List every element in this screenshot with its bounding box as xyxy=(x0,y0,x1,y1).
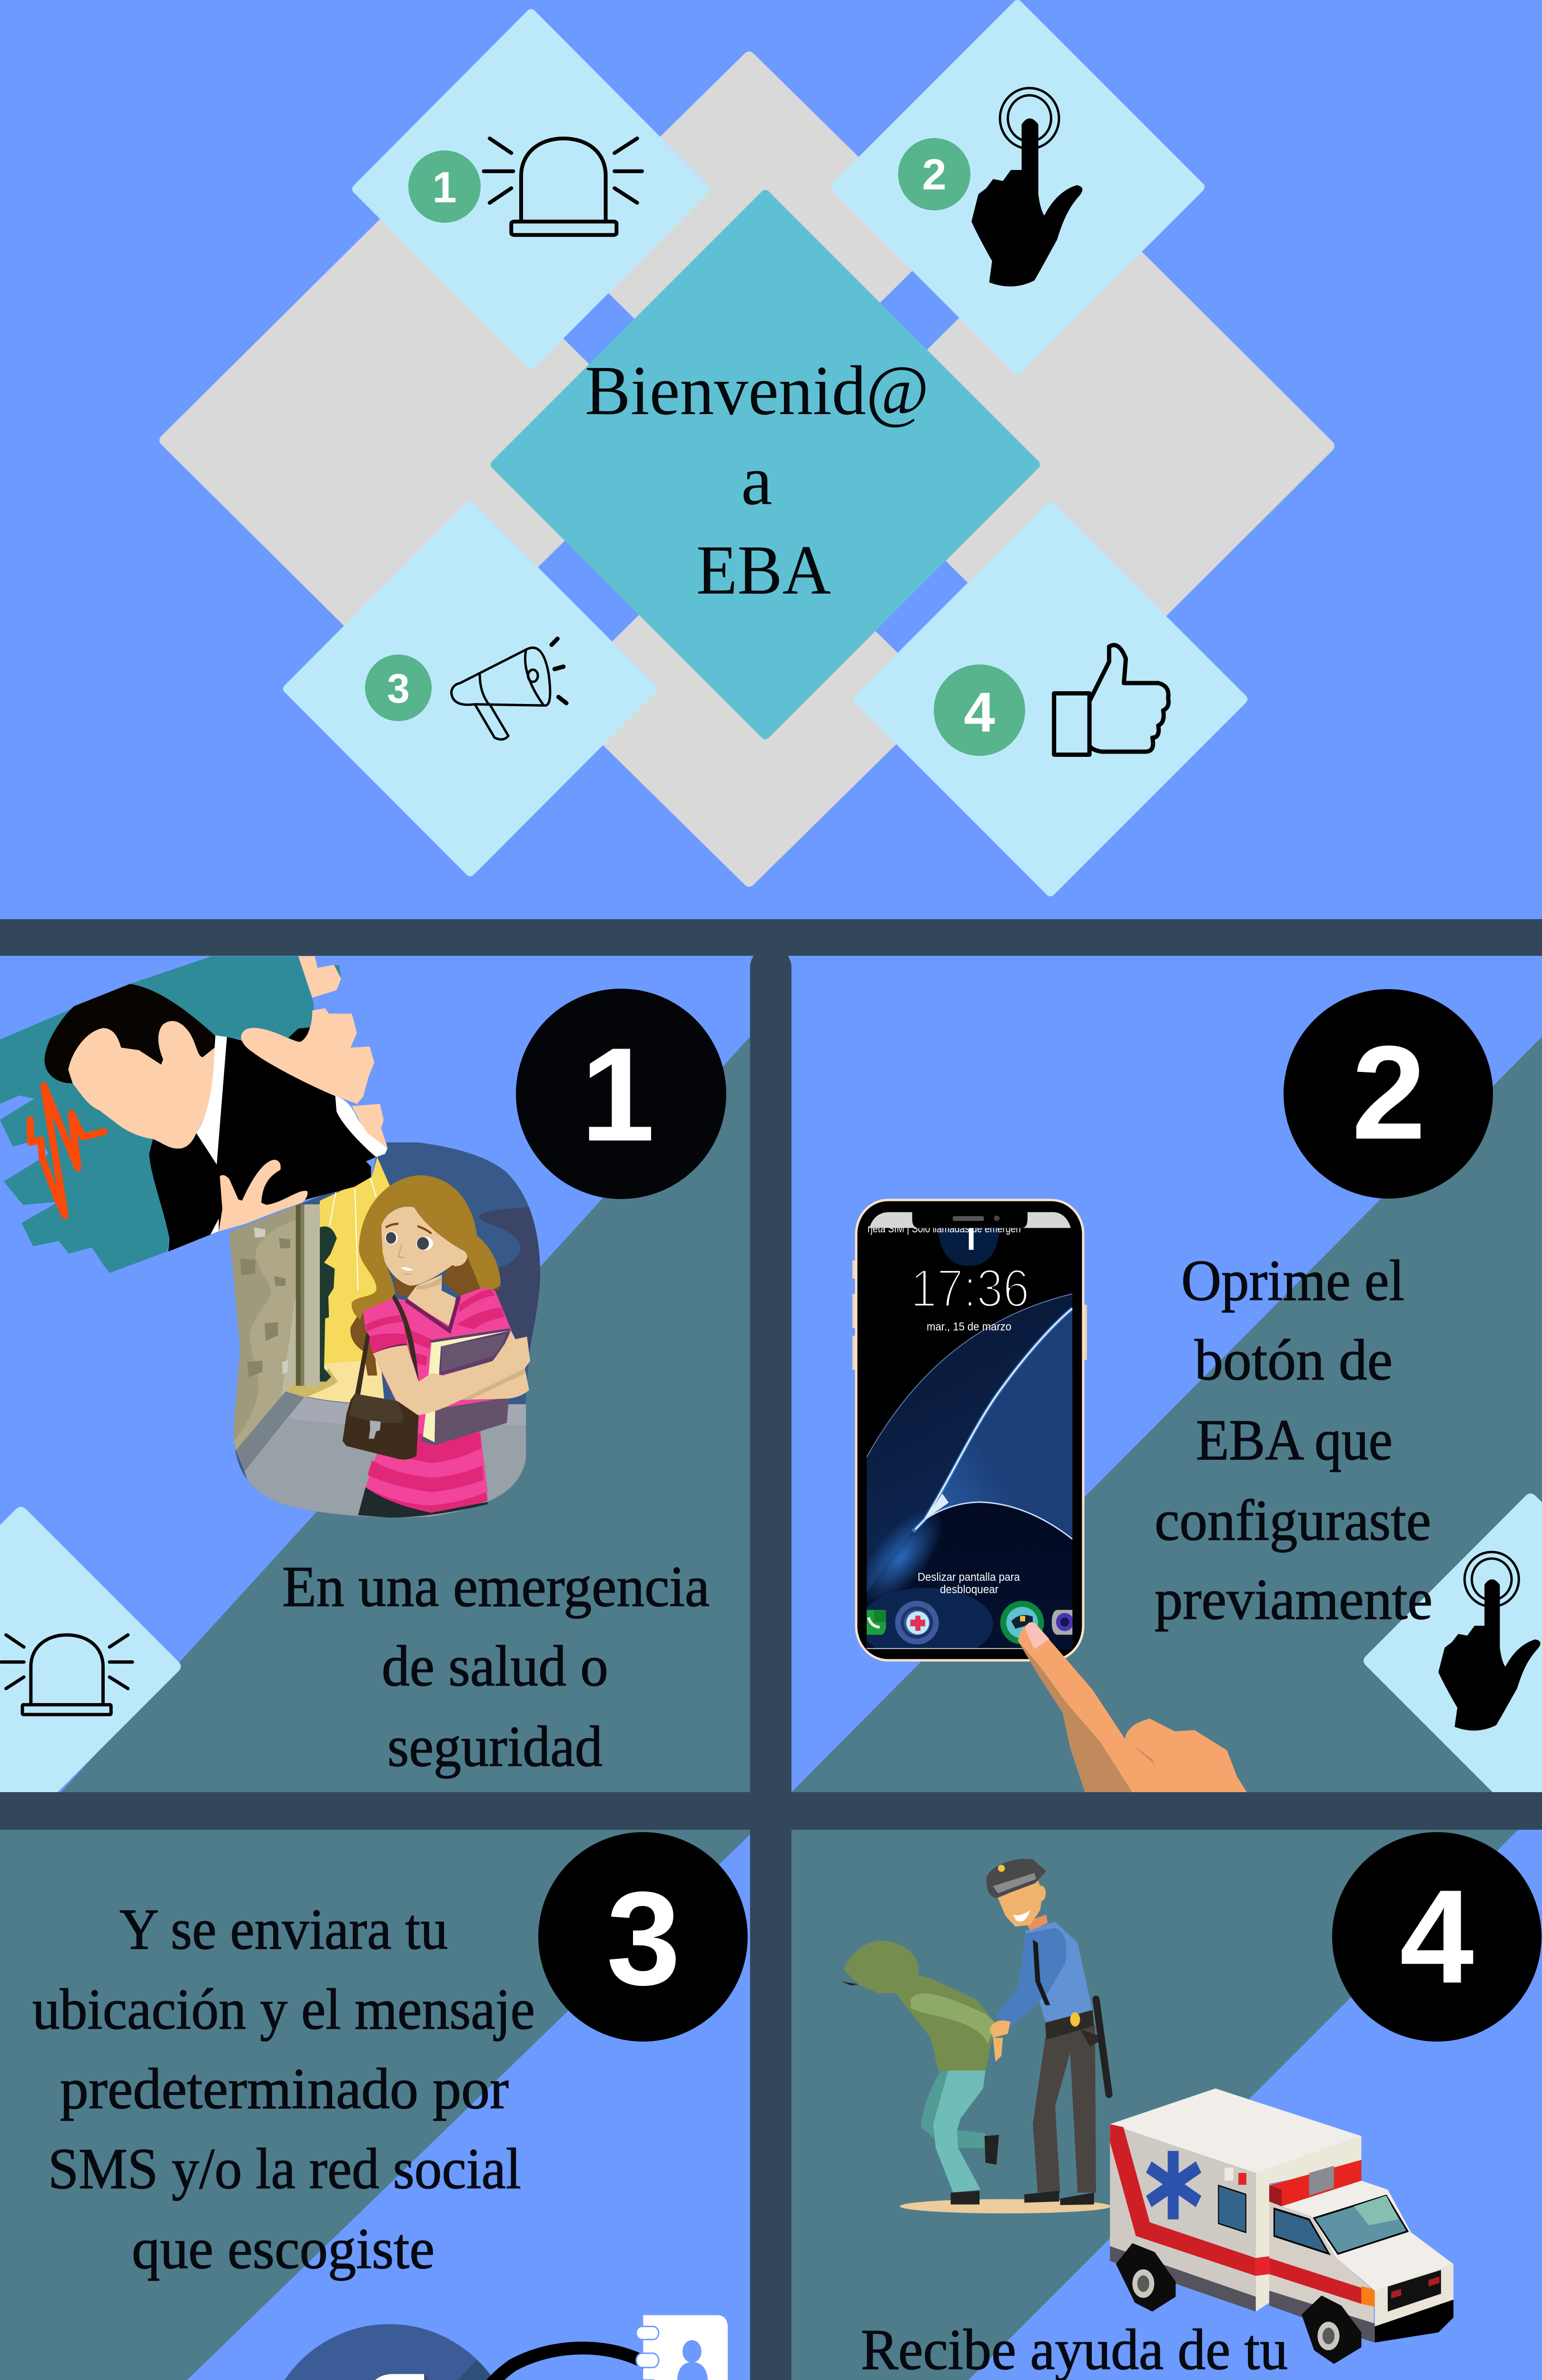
phone unlock hint xyxy=(918,1571,1020,1596)
panel 4 diagonal xyxy=(791,1830,1518,2380)
police officer xyxy=(987,1859,1109,2205)
phone unlock hint: desbloquear xyxy=(940,1583,998,1596)
number badge 1: 1 xyxy=(581,1021,655,1169)
panel 3 text: SMS y/o la red social xyxy=(48,2137,521,2201)
panel 1 text: seguridad xyxy=(387,1715,603,1779)
hero diamond cluster xyxy=(165,5,1329,892)
title: Bienvenid@ a EBA xyxy=(585,352,929,609)
panel 2 corner diamond with hand icon xyxy=(1364,1494,1542,1792)
number badge 1 xyxy=(516,989,726,1199)
number badge 4: 4 xyxy=(1400,1863,1475,2011)
finger pressing button xyxy=(1018,1622,1247,1793)
phone notch and top xyxy=(870,1210,1071,1228)
panel 1 text: de salud o xyxy=(382,1634,608,1698)
title: Bienvenid@ a EBA: EBA xyxy=(696,531,831,609)
phone with lock screen xyxy=(852,1200,1087,1661)
diamond 3: megaphone xyxy=(288,506,652,872)
thief xyxy=(841,1941,1003,2204)
diamond 1: alarm xyxy=(357,14,705,364)
panel 2 text: Oprime el xyxy=(1181,1249,1404,1313)
panel 3: send location xyxy=(0,1830,750,2380)
girl xyxy=(343,1175,530,1517)
social icons: facebook, SMS, contact, pin, mail xyxy=(263,2315,728,2380)
icon: speech bubble xyxy=(465,2348,709,2380)
panel 4: receive help xyxy=(791,1830,1542,2380)
diamond 3: megaphone: 3 xyxy=(387,666,410,712)
icon: contact book xyxy=(636,2315,728,2380)
grey diamonds backdrop xyxy=(165,57,1329,881)
diamond 4: thumbs up: 4 xyxy=(964,681,995,744)
number badge 3: 3 xyxy=(606,1864,681,2013)
number badge 2 xyxy=(1284,989,1493,1199)
phone unlock hint: Deslizar pantalla para xyxy=(918,1571,1020,1584)
diamond 2: press button: 2 xyxy=(922,150,947,199)
phone clock: 17:36 xyxy=(910,1259,1029,1318)
panel 2 text: botón de xyxy=(1195,1328,1393,1392)
number badge 2: 2 xyxy=(1352,1019,1426,1167)
panel 2: press button xyxy=(791,989,1542,1793)
panel 3 diagonal xyxy=(0,1830,750,2380)
panel 2 diagonal xyxy=(791,1037,1542,1792)
number badge 4 xyxy=(1332,1832,1542,2042)
illustration: police arresting thief xyxy=(841,1859,1111,2213)
illustration: girl in dark street xyxy=(219,1140,552,1524)
horizontal divider bar top xyxy=(0,919,1542,956)
title: Bienvenid@ a EBA: a xyxy=(741,442,772,520)
panel 3 text: que escogiste xyxy=(132,2217,435,2281)
diamond 4: thumbs up xyxy=(858,507,1243,892)
panel 3 text: predeterminado por xyxy=(60,2057,509,2121)
panel 3 text: Y se enviara tu xyxy=(119,1897,448,1962)
panel 2 text: previamente xyxy=(1155,1567,1433,1632)
phone date: mar., 15 de marzo xyxy=(927,1320,1011,1333)
panel 3 text xyxy=(32,1897,535,2281)
title: Bienvenid@ a EBA: Bienvenid@ xyxy=(585,352,929,430)
panel 1 diagonal xyxy=(61,1037,750,1792)
diamond 2: press button xyxy=(835,5,1200,369)
illustration: man with chest pain xyxy=(0,956,387,1273)
panel 4 text: Recibe ayuda de tu xyxy=(861,2318,1288,2380)
panel 1 text xyxy=(282,1555,710,1779)
panel 2 text xyxy=(1155,1249,1433,1632)
panel 1 text: En una emergencia xyxy=(282,1555,710,1619)
panel 1: emergency xyxy=(0,956,750,1792)
horizontal divider bar middle xyxy=(0,1792,1542,1830)
number badge 3 xyxy=(538,1832,748,2042)
illustration: ambulance xyxy=(1110,2089,1453,2364)
panel 2 text: EBA que xyxy=(1196,1408,1393,1472)
icon: facebook xyxy=(263,2324,528,2380)
phone status text: rjeta SIM | Solo llamadas de emergen xyxy=(868,1222,1021,1235)
panel 1 corner diamond with alarm icon xyxy=(0,1507,181,1792)
panel 3 text: ubicación y el mensaje xyxy=(32,1977,535,2042)
panel 2 text: configuraste xyxy=(1155,1488,1431,1553)
center diamond xyxy=(495,195,1035,734)
vertical divider bar xyxy=(750,947,791,2380)
diamond 1: alarm: 1 xyxy=(432,163,457,212)
